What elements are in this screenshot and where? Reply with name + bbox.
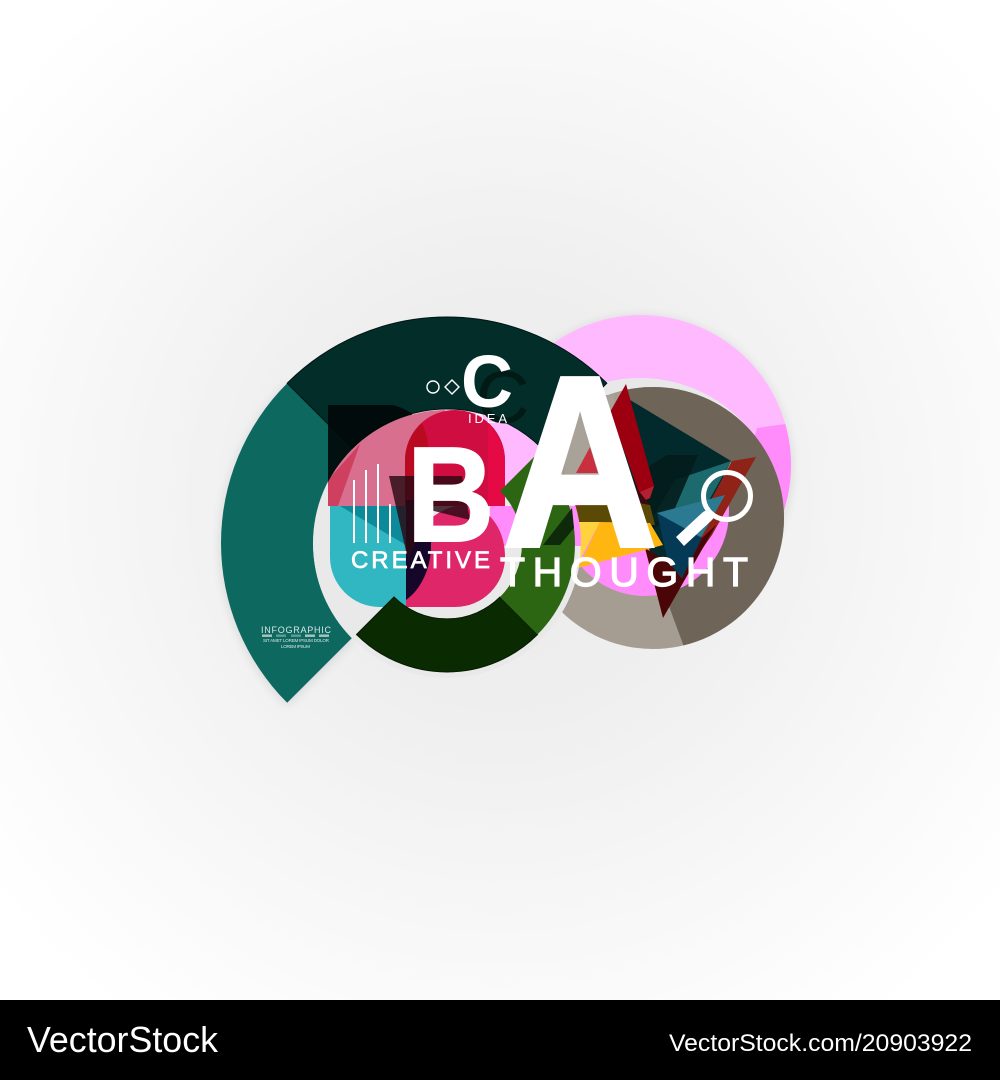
pale pink area	[445, 410, 562, 486]
dark band over green	[543, 508, 574, 545]
panel: small ring green segment	[500, 454, 575, 634]
panel: triangles cluster	[565, 384, 756, 618]
dark center column	[406, 500, 431, 600]
red lower spike	[612, 486, 654, 510]
letter B: B	[407, 419, 494, 570]
red shard in the letter counter	[576, 447, 598, 473]
crimson tile	[405, 410, 505, 506]
maroon spike	[645, 525, 716, 618]
crimson spike	[610, 384, 654, 495]
small infographic caption	[261, 625, 332, 649]
brick red strip	[680, 457, 756, 580]
icon: magnifier	[676, 472, 750, 546]
darker rose facet	[328, 444, 360, 506]
lighter teal facet	[650, 461, 731, 522]
small infographic caption: INFOGRAPHIC	[261, 625, 332, 635]
panel: big ring left teal segment	[221, 383, 352, 703]
icon: diamond	[445, 380, 459, 394]
panel: pink ring	[506, 314, 794, 520]
cyan tile	[330, 506, 406, 607]
pale gap circle	[526, 378, 746, 446]
THOUGHT label: THOUGHT	[500, 549, 748, 595]
magenta inner disc	[561, 428, 729, 596]
IDEA label: IDEA	[468, 411, 507, 426]
letter C shadow: C	[476, 356, 529, 439]
panel: central inner disc	[313, 410, 581, 638]
navy facet	[657, 513, 702, 578]
dark shard under the crossbar	[565, 480, 650, 505]
panel: brown disc	[561, 387, 784, 649]
dark overlay facet	[632, 455, 698, 530]
footer image id: VectorStock.com/20903922	[669, 1030, 972, 1057]
panel: small ring bottom dark segment	[356, 597, 538, 672]
panel: big ring top dark segment	[287, 317, 607, 448]
bar lines icon	[353, 464, 391, 543]
small infographic caption: SIT AMET LOREM IPSUM DOLOR	[263, 638, 330, 643]
olive shard	[572, 498, 655, 525]
footer brand: VectorStock	[27, 1019, 219, 1060]
dark teal triangle	[615, 395, 731, 600]
blue facet	[657, 495, 725, 548]
small infographic caption: LOREM IPSUM	[281, 644, 310, 649]
icon: circle	[427, 381, 439, 393]
dark D overlay	[328, 405, 436, 506]
light patch behind letter counter	[565, 395, 614, 476]
red shard below the letter	[568, 498, 607, 510]
magenta tile	[406, 505, 505, 607]
footer bar	[0, 1000, 1000, 1080]
letter C: C	[461, 340, 513, 423]
rose tile	[328, 400, 445, 506]
magenta area	[490, 506, 590, 546]
CREATIVE label: CREATIVE	[351, 547, 490, 574]
letter A: A	[502, 325, 658, 598]
orange shard	[578, 522, 663, 568]
dark center triangle	[389, 476, 470, 560]
yellow shard	[575, 522, 600, 566]
